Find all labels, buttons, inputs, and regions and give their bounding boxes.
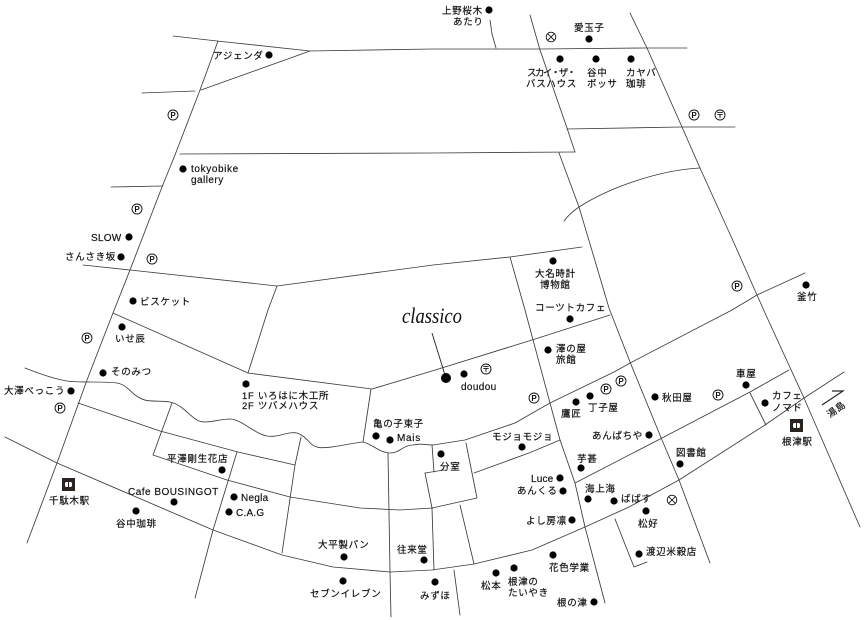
place: 松好 — [638, 507, 658, 530]
place: 大名時計博物館 — [535, 257, 576, 291]
place: 亀の子束子 — [372, 418, 424, 440]
place: C.A.G: C.A.G — [236, 508, 265, 519]
place: doudou: doudou — [461, 382, 497, 393]
place: 平澤剛生花店 — [167, 453, 228, 474]
place: コーツトカフェ: コーツトカフェ — [535, 303, 606, 314]
place: 澤の屋旅館: 旅館 — [556, 354, 576, 366]
icon: parking: P — [618, 377, 624, 386]
place: 丁子屋 — [586, 392, 619, 414]
place: 図書館 — [676, 447, 707, 468]
place: 分室 — [437, 450, 460, 473]
place: コーツトカフェ — [535, 303, 606, 323]
icon: parking: P — [691, 111, 697, 120]
place: 鷹匠: 鷹匠 — [561, 408, 581, 420]
place: 芋甚 — [577, 454, 597, 472]
place: tokyobike gallery: gallery — [191, 175, 224, 186]
icon: parking: P — [84, 334, 90, 343]
place: 谷中ボッサ — [587, 55, 618, 90]
place: よし房凛: よし房凛 — [526, 515, 567, 527]
place: カヤバ珈琲: カヤバ — [626, 68, 656, 79]
place: 往来堂 — [397, 544, 428, 564]
place: みずほ: みずほ — [420, 591, 451, 602]
place: SLOW: SLOW — [91, 233, 122, 244]
place: いろはに木工所 / ツバメハウス: 1F いろはに木工所 — [242, 390, 329, 402]
place: 上野桜木あたり — [442, 5, 493, 28]
icon: parking: P — [149, 255, 155, 264]
place: いせ辰: いせ辰 — [115, 334, 146, 345]
place: みずほ — [420, 578, 451, 602]
place: そのみつ: そのみつ — [111, 367, 152, 378]
place: 亀の子束子: 亀の子束子 — [373, 418, 424, 430]
place: 釜竹: 釜竹 — [797, 291, 817, 303]
pointer: classico location — [432, 333, 451, 383]
place: 上野桜木あたり: 上野桜木 — [442, 5, 483, 17]
place: いろはに木工所 / ツバメハウス — [242, 380, 329, 412]
place: 松好: 松好 — [638, 518, 658, 530]
place: カフェノマド: ノマド — [772, 403, 803, 414]
icon: parking: P — [603, 385, 609, 394]
place: 谷中ボッサ: ボッサ — [587, 79, 618, 90]
place: tokyobike gallery — [179, 164, 239, 186]
icon: parking — [147, 254, 157, 264]
icon: parking — [55, 403, 65, 413]
place: 海上海: 海上海 — [585, 483, 616, 495]
place: 大平製パン — [318, 539, 369, 561]
place: 大名時計博物館: 博物館 — [540, 279, 571, 291]
logo: classico: classico — [402, 303, 462, 328]
icon: police box — [667, 495, 677, 505]
icon: parking — [601, 384, 611, 394]
place: あんくる: あんくる — [517, 486, 558, 497]
place: Negla: Negla — [241, 493, 269, 504]
place: 鷹匠 — [561, 398, 581, 420]
icon: parking — [82, 333, 92, 343]
place: カヤバ珈琲: 珈琲 — [626, 78, 646, 90]
place: 丁子屋: 丁子屋 — [588, 403, 619, 414]
place: Cafe BOUSINGOT: Cafe BOUSINGOT — [128, 487, 219, 498]
place: 根津のたいやき: 根津の — [508, 576, 539, 588]
icon: post office: 〒 — [482, 365, 490, 374]
place: カフェノマド — [761, 391, 803, 414]
icon: parking: P — [57, 404, 63, 413]
place: カヤバ珈琲 — [626, 55, 656, 90]
place: 根津のたいやき — [508, 564, 549, 599]
place: 大名時計博物館: 大名時計 — [535, 268, 576, 280]
icon: parking: P — [134, 205, 140, 214]
icon: 千駄木駅 station — [49, 478, 90, 507]
place: doudou — [460, 370, 497, 393]
place: 花色学業: 花色学業 — [549, 562, 590, 574]
place: ビスケット: ビスケット — [140, 297, 191, 308]
arrow: to 湯島: 湯島 — [825, 399, 848, 420]
place: 谷中珈琲: 谷中珈琲 — [116, 518, 157, 530]
icon: parking: P — [170, 111, 176, 120]
place: tokyobike gallery: tokyobike — [191, 164, 239, 175]
place: さんさき坂: さんさき坂 — [65, 251, 116, 263]
place: 花色学業 — [549, 551, 590, 574]
place: 往来堂: 往来堂 — [397, 544, 428, 556]
place: Luce: Luce — [531, 474, 554, 485]
place: 秋田屋 — [651, 392, 693, 404]
place: Mais: Mais — [397, 433, 421, 444]
river — [25, 368, 433, 453]
place: 愛玉子 — [574, 22, 605, 43]
place: 海上海 — [584, 483, 616, 503]
place: 分室: 分室 — [440, 461, 460, 473]
place: 澤の屋旅館 — [544, 344, 587, 366]
place: スカイ・ザ・バスハウス — [526, 55, 577, 90]
place: モジョモジョ: モジョモジョ — [492, 432, 553, 443]
place: あんぱちや: あんぱちや — [592, 431, 643, 442]
place: いせ辰 — [115, 323, 146, 345]
icon: 千駄木駅 station: 千駄木駅 — [49, 495, 90, 507]
place: 松本: 松本 — [481, 580, 501, 592]
place: 根の津 — [557, 597, 598, 609]
icon: parking — [529, 393, 539, 403]
icon: parking — [168, 110, 178, 120]
place: 秋田屋: 秋田屋 — [662, 392, 693, 404]
place: セブンイレブン: セブンイレブン — [310, 588, 381, 600]
icon: parking — [732, 281, 742, 291]
place: 松本 — [481, 569, 501, 592]
place: ばばす: ばばす — [621, 494, 652, 505]
icon: 根津駅 station — [782, 419, 813, 448]
icon: police box — [546, 32, 556, 42]
icon: parking — [689, 110, 699, 120]
place: 渡辺米穀店: 渡辺米穀店 — [646, 546, 697, 558]
place: セブンイレブン — [310, 577, 381, 600]
place: 根の津: 根の津 — [557, 597, 588, 609]
icon: post office: 〒 — [716, 111, 724, 120]
place: 大平製パン: 大平製パン — [318, 539, 369, 551]
place: 釜竹 — [797, 281, 817, 303]
icon: parking: P — [715, 391, 721, 400]
place: スカイ・ザ・バスハウス: スカイ・ザ・ — [527, 68, 577, 79]
place: Mais — [386, 433, 421, 444]
place: 平澤剛生花店: 平澤剛生花店 — [167, 453, 228, 465]
place: いろはに木工所 / ツバメハウス: 2F ツバメハウス — [242, 401, 319, 412]
icon: parking — [713, 390, 723, 400]
arrow: to 湯島 — [822, 391, 848, 420]
place: Cafe BOUSINGOT — [128, 487, 219, 506]
place: 根津のたいやき: たいやき — [508, 588, 549, 599]
place: スカイ・ザ・バスハウス: バスハウス — [526, 79, 577, 90]
place: 谷中珈琲 — [116, 507, 157, 530]
place: アジェンダ: アジェンダ — [213, 50, 264, 62]
place: 澤の屋旅館: 澤の屋 — [556, 344, 587, 355]
place: 大澤べっこう: 大澤べっこう — [4, 385, 65, 397]
place: 車屋: 車屋 — [736, 368, 756, 380]
place: 車屋 — [736, 368, 756, 389]
place: 愛玉子: 愛玉子 — [574, 22, 605, 34]
icon: parking: P — [531, 394, 537, 403]
icon: 根津駅 station: 根津駅 — [782, 436, 813, 448]
place: 芋甚: 芋甚 — [577, 454, 597, 465]
place: カフェノマド: カフェ — [772, 391, 803, 402]
icon: parking: P — [734, 282, 740, 291]
icon: parking — [132, 204, 142, 214]
place: 図書館: 図書館 — [676, 447, 707, 459]
place: 上野桜木あたり: あたり — [453, 17, 484, 28]
place: モジョモジョ — [492, 432, 553, 451]
place: 谷中ボッサ: 谷中 — [587, 67, 607, 79]
icon: parking — [616, 376, 626, 386]
